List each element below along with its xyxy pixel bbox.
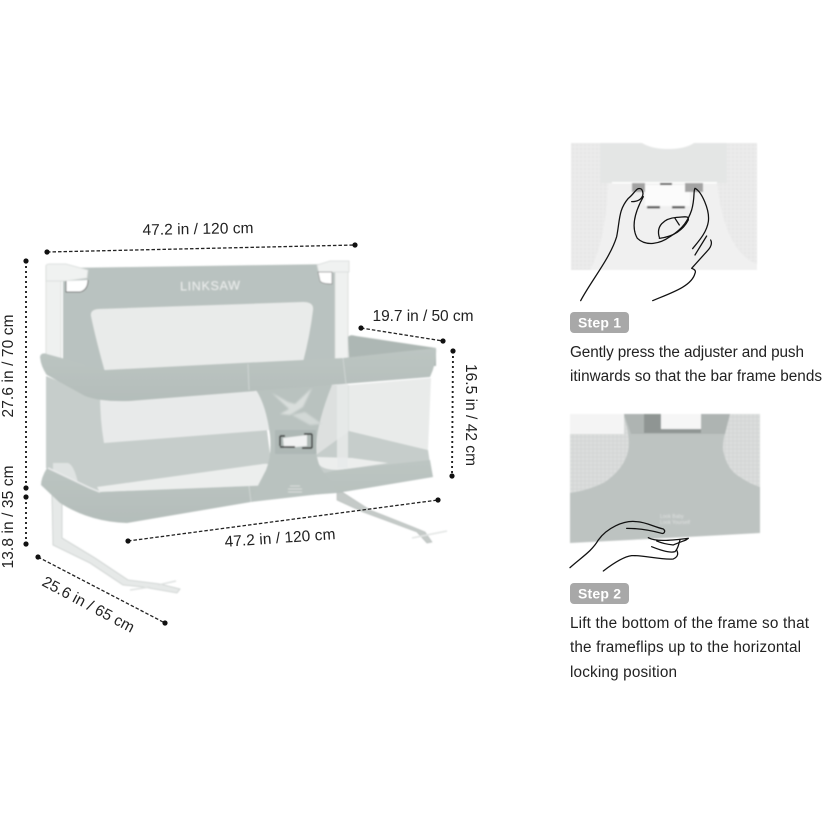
dimension: foot length: 25.6 in / 65 cm [39,574,137,636]
dimension: upper height [0,258,29,491]
dimension: side height [449,348,479,479]
right side lower strip [316,431,432,490]
right side mesh wall [349,378,431,450]
back panel [63,264,336,400]
dimension: bottom width [125,497,441,551]
bird emblem [272,388,322,425]
left post with corner joint [46,264,88,374]
bassinet illustration [40,261,447,593]
dimension: bottom width: 47.2 in / 120 cm [224,526,336,551]
step 2 instructions: the frameflips up to the horizontal [570,639,801,656]
dimension: side width: 19.7 in / 50 cm [372,308,474,325]
right post with corner joint [317,261,349,373]
post seen through the mesh [337,384,348,468]
dimension: side width [358,308,474,344]
step 2 badge: Step 2 [578,586,621,602]
step 1 instructions: itinwards so that the bar frame bends [570,368,822,385]
step 2 hand line drawing [570,521,688,571]
floor strip left [97,464,273,492]
front top rail [40,348,436,401]
visible back window through front mesh [100,390,270,443]
rail seams [248,358,346,502]
step 2 badge [570,583,629,604]
center buckle [275,430,316,454]
step 2 instructions: locking position [570,664,677,681]
lower left post stub [53,463,78,483]
far side rail inside [348,335,436,366]
lower frame band [41,460,433,523]
step 2 instructions: Lift the bottom of the frame so that [570,615,810,632]
center front panel [248,385,338,502]
left foot crosspiece [130,581,176,590]
back window [91,302,313,372]
gap mesh beside centre panel [310,385,350,470]
front left mesh area [46,376,272,495]
logo wordmark: LINKSAW [180,278,240,294]
step 2 instructions [570,615,810,681]
dimension: top width [44,220,358,255]
dimension: top width: 47.2 in / 120 cm [142,220,254,239]
dimension: lower height: 13.8 in / 35 cm [0,466,17,568]
step 1 photo with hands [571,143,757,301]
right foot crosspiece [412,531,447,538]
step 2 photo with hand [570,414,760,571]
right floor light [317,457,388,470]
left floor leg [52,495,180,593]
step 1 instructions: Gently press the adjuster and push [570,344,804,361]
dimension: foot length [35,554,168,636]
dimension: side height: 16.5 in / 42 cm [462,364,479,466]
step 1 instructions [570,344,822,385]
step 2 photo with hand: Look Yourself [660,520,691,526]
step 1 badge: Step 1 [578,314,621,330]
inner edge of the lower left corner [48,468,100,492]
right floor leg [337,492,432,543]
step 2 photo with hand: Look Baby [660,514,684,520]
dimension: upper height: 27.6 in / 70 cm [0,314,17,418]
step 1 badge [570,312,629,333]
step 1 hands line drawing [581,188,711,301]
small logo marks [288,486,302,492]
dimension: lower height [0,466,29,568]
